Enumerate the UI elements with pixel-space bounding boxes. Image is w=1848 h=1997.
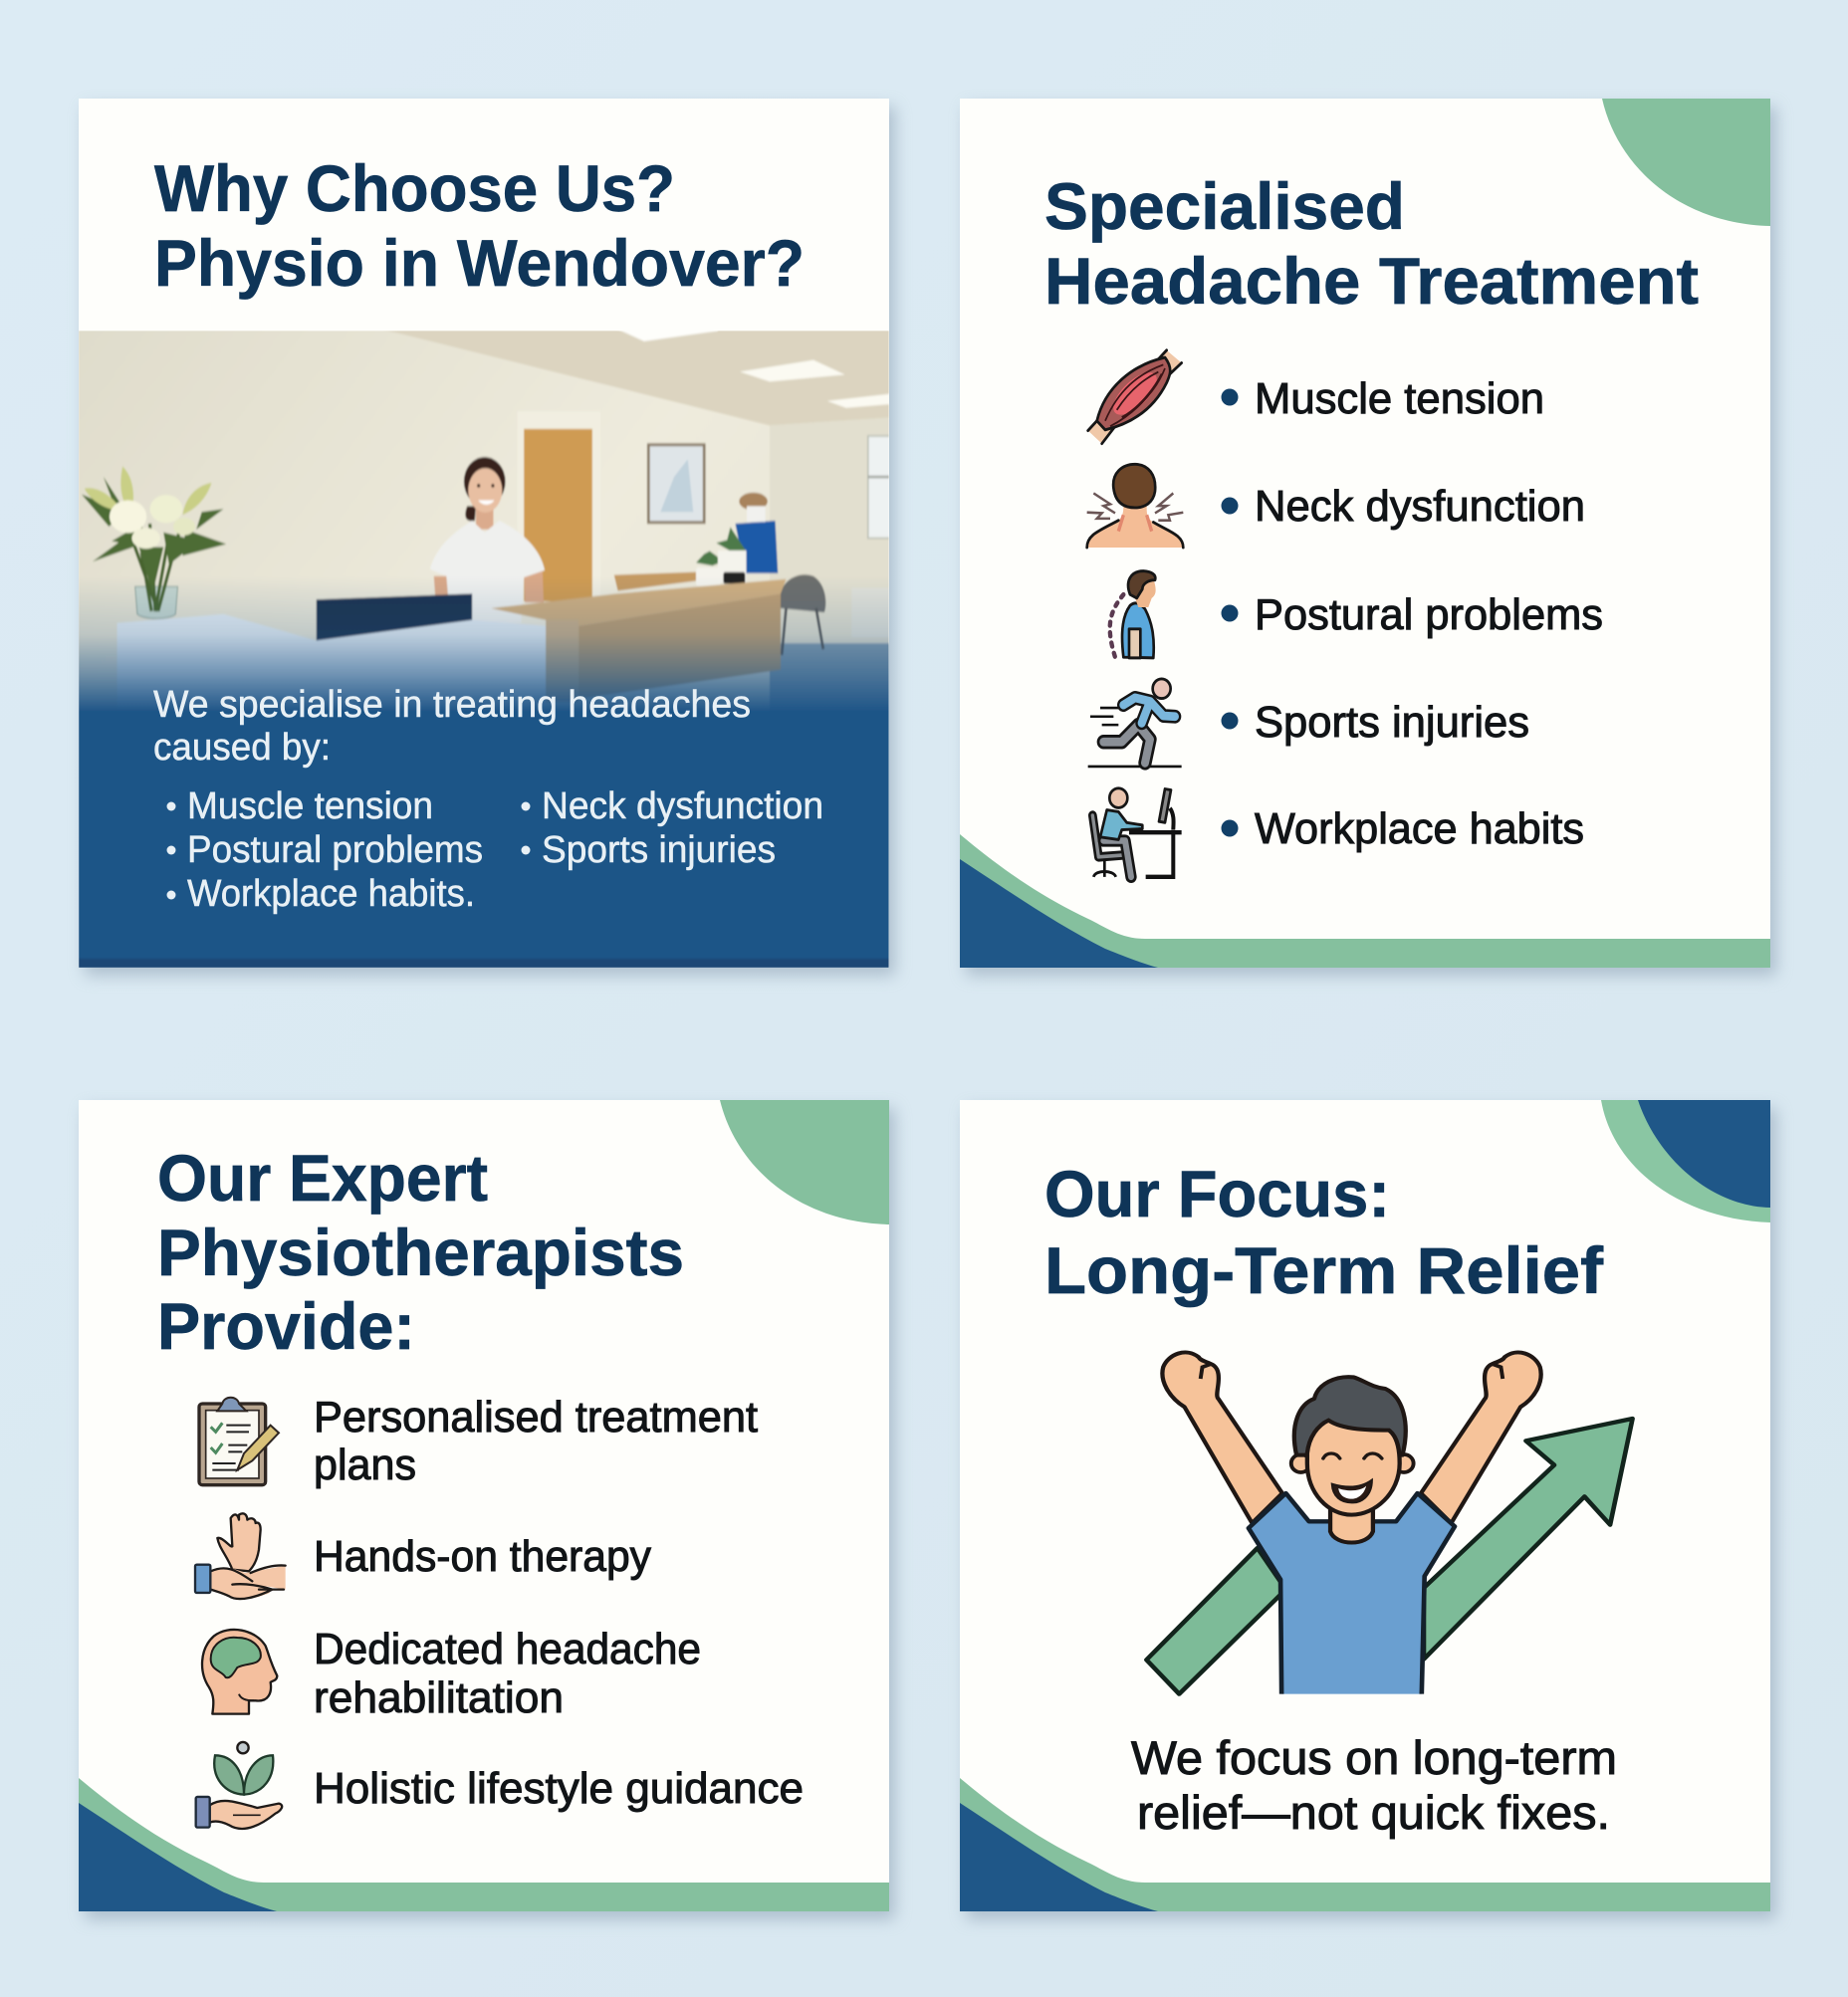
icon: plant in hand <box>196 1742 282 1829</box>
heading <box>157 1141 684 1363</box>
panel: why choose us <box>74 99 895 980</box>
heading: Specialised <box>1044 169 1405 243</box>
icons column <box>195 1398 286 1829</box>
icon: runner <box>1088 679 1182 767</box>
services list <box>314 1393 804 1813</box>
bulleted causes list: Workplace habits. <box>187 873 475 915</box>
intro text: caused by: <box>153 727 331 769</box>
icon: posture <box>1110 571 1156 658</box>
icon: desk worker <box>1092 788 1182 877</box>
icon: head with brain <box>202 1630 277 1714</box>
icon: neck pain <box>1087 464 1183 548</box>
heading: Provide: <box>157 1289 415 1363</box>
flowers in vase <box>82 466 226 618</box>
services list: rehabilitation <box>314 1673 564 1722</box>
closing statement <box>1131 1731 1617 1839</box>
services list: Dedicated headache <box>314 1625 701 1673</box>
receptionist <box>430 457 545 623</box>
heading <box>1044 1157 1604 1307</box>
heading: Why Choose Us? <box>154 151 675 225</box>
treatment list: Sports injuries <box>1255 698 1529 747</box>
intro text: We specialise in treating headaches <box>153 684 751 726</box>
illustration: happy person with rising arrow <box>1146 1353 1633 1694</box>
panel: expert physiotherapists <box>79 1100 895 1919</box>
services list: Holistic lifestyle guidance <box>314 1764 804 1813</box>
person <box>1162 1353 1541 1694</box>
bulleted causes list <box>167 785 823 915</box>
treatment list: Postural problems <box>1255 590 1603 639</box>
arrow <box>1146 1419 1633 1694</box>
treatment list: Muscle tension <box>1255 374 1544 423</box>
heading <box>154 151 805 300</box>
heading: Our Expert <box>157 1141 488 1215</box>
heading <box>1044 169 1699 318</box>
heading: Long-Term Relief <box>1044 1233 1604 1307</box>
treatment list: Neck dysfunction <box>1255 482 1585 531</box>
panel: long-term relief <box>960 1100 1776 1919</box>
treatment list <box>1221 374 1603 853</box>
bulleted causes list: Muscle tension <box>187 785 433 827</box>
heading: Physio in Wendover? <box>154 226 805 300</box>
bulleted causes list: Neck dysfunction <box>542 785 823 827</box>
panel: specialised headache treatment <box>960 99 1776 976</box>
services list: Hands-on therapy <box>314 1532 651 1581</box>
closing statement: relief—not quick fixes. <box>1137 1786 1610 1839</box>
heading: Headache Treatment <box>1044 244 1699 318</box>
icon: hands-on <box>195 1513 286 1599</box>
treatment list: Workplace habits <box>1255 804 1584 853</box>
bulleted causes list: Postural problems <box>187 829 483 871</box>
services list: Personalised treatment <box>314 1393 758 1442</box>
heading: Physiotherapists <box>157 1216 684 1289</box>
heading: Our Focus: <box>1044 1157 1390 1230</box>
icons column <box>1087 350 1183 877</box>
closing statement: We focus on long-term <box>1131 1731 1617 1784</box>
bulleted causes list: Sports injuries <box>542 829 776 871</box>
icon: clipboard <box>199 1398 279 1485</box>
intro text <box>153 684 751 769</box>
reception photo <box>74 325 894 980</box>
icon: muscle <box>1088 350 1182 444</box>
services list: plans <box>314 1441 416 1489</box>
